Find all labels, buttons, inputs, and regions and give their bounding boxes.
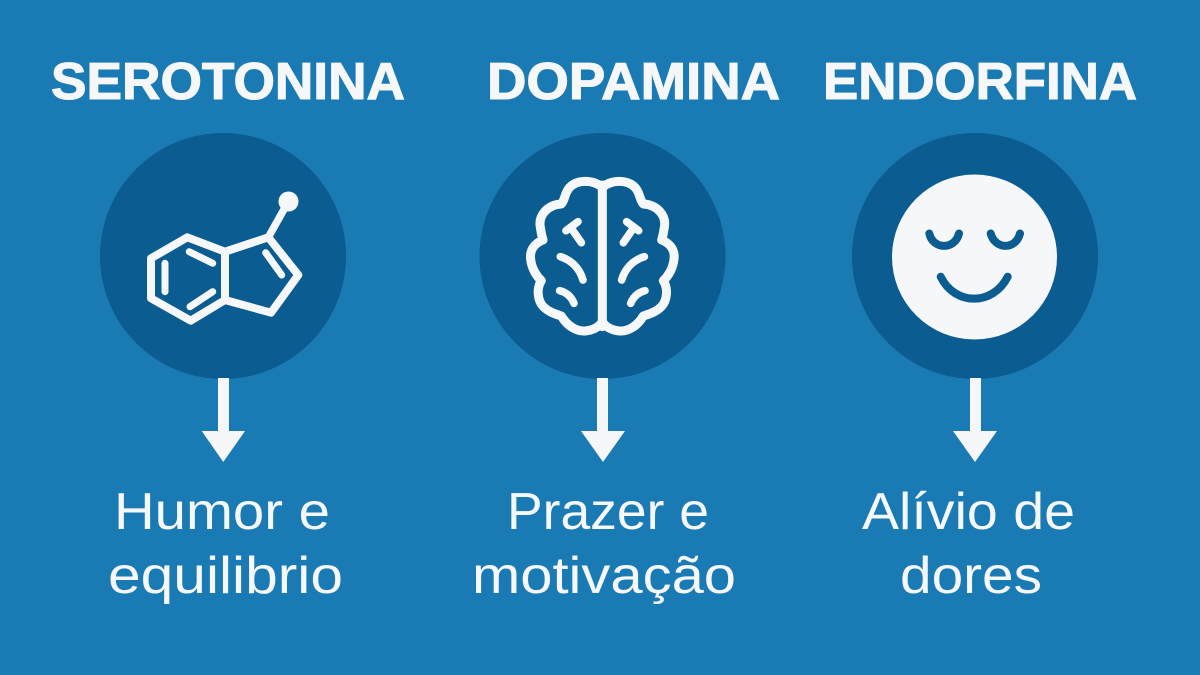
label: alivio de dores: dores [900,547,1042,605]
heading: endorfina: ENDORFINA [823,53,1137,111]
heading: serotonina: SEROTONINA [51,53,405,111]
label: humor e equilibrio [108,483,343,605]
heading: dopamina: DOPAMINA [487,53,780,111]
label: humor e equilibrio: equilibrio [108,547,343,605]
label: prazer e motivacao: Prazer e [507,483,709,541]
column: dopamina [472,53,780,605]
label: alivio de dores [862,483,1075,605]
label: humor e equilibrio: Humor e [114,483,330,541]
label: prazer e motivacao: motivação [472,547,736,605]
icon circle: serotonina [100,133,346,379]
icon: smiling face [892,174,1057,340]
icon circle: endorfina [852,133,1098,379]
icon: brain [530,181,674,331]
arrow: endorfina [953,378,997,462]
arrow: serotonina [202,378,245,462]
column: endorfina [823,53,1137,605]
icon: molecule [151,192,298,321]
label: alivio de dores: Alívio de [862,483,1075,541]
label: prazer e motivacao [472,483,736,605]
column: serotonina [51,53,405,605]
arrow: dopamina [581,378,625,462]
icon circle: dopamina [480,133,726,379]
